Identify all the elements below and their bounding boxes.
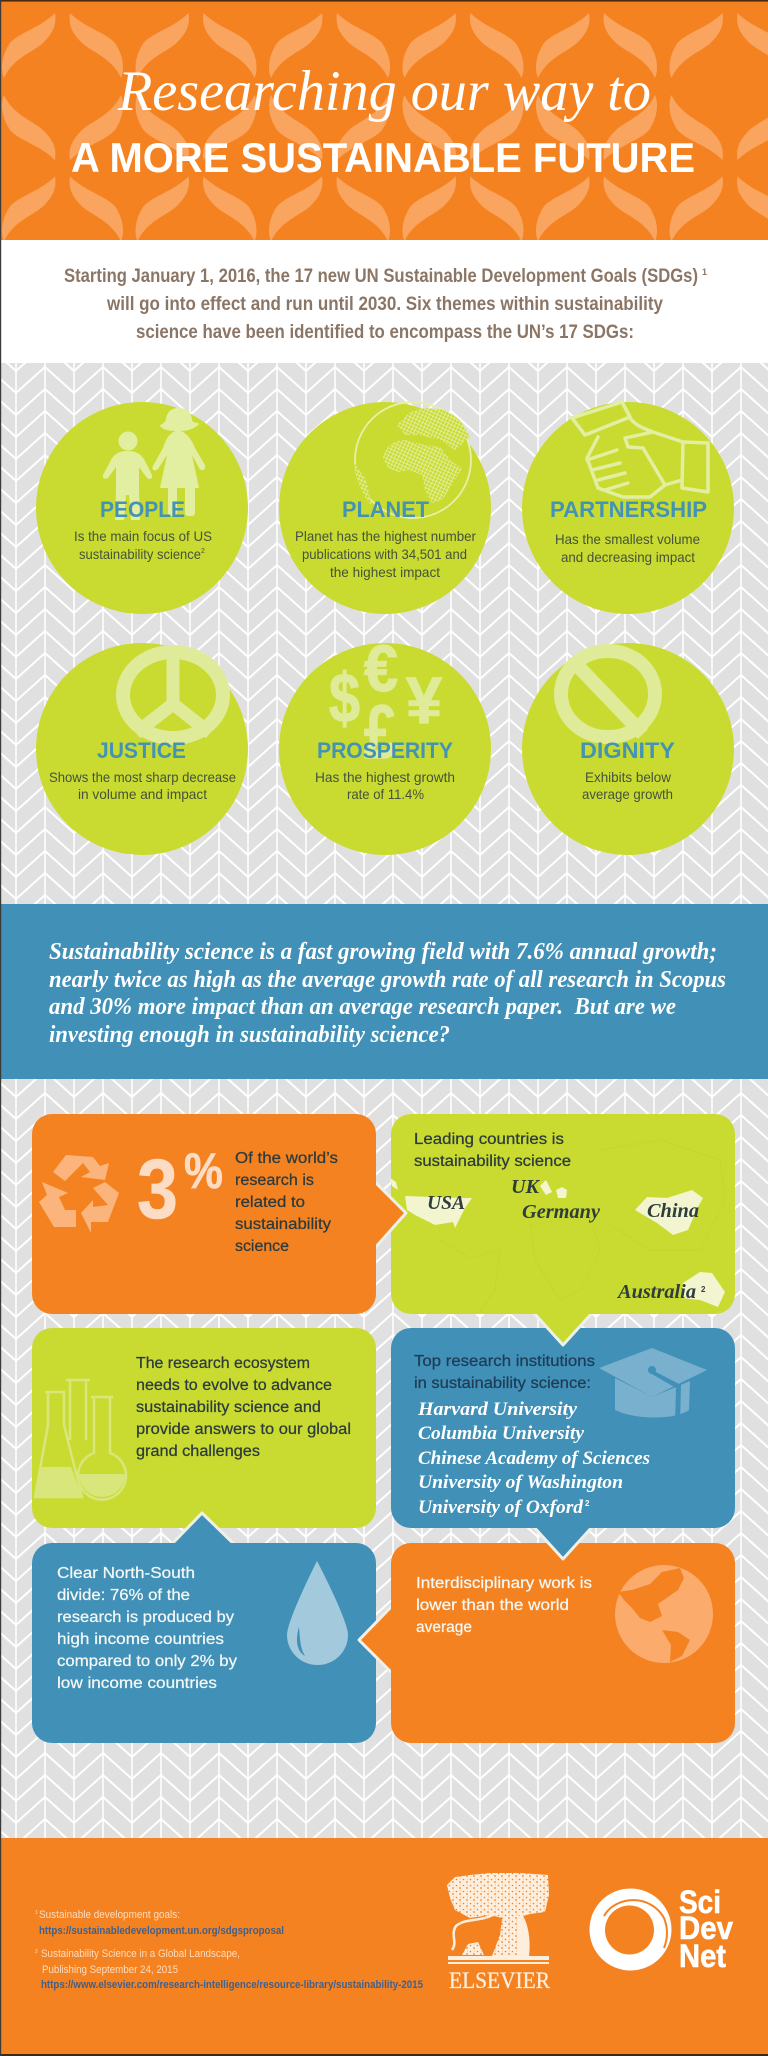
list: institutions: Harvard University <box>417 1399 578 1420</box>
footnotes: https://sustainabledevelopment.un.org/sdgsproposal <box>39 1925 284 1937</box>
arrow: down to interdisciplinary panel <box>533 1526 593 1559</box>
list: institutions <box>417 1399 650 1518</box>
map: faint outlines <box>430 1140 725 1312</box>
text: share of research: related to <box>235 1194 305 1211</box>
map labels: Germany <box>522 1201 600 1223</box>
footnotes: Publishing September 24, 2015 <box>42 1964 178 1976</box>
intro text block: 1 <box>702 267 707 277</box>
text: north-south divide: Clear North-South <box>57 1565 195 1582</box>
panel: interdisciplinary work <box>359 1543 735 1743</box>
panel: 3 percent <box>32 1114 406 1314</box>
text: planet: Planet has the highest number <box>295 528 476 544</box>
blue statement band: nearly twice as high as the average growth rate of all research in Scopus <box>49 967 726 993</box>
panel: north-south divide <box>32 1513 376 1743</box>
icon: currency symbols: $ <box>329 659 360 737</box>
text: partnership: Has the smallest volume <box>555 531 700 547</box>
footnotes: Sustainable development goals: <box>39 1909 180 1921</box>
panel: people <box>36 402 248 614</box>
text: partnership <box>555 531 700 565</box>
list: institutions: Chinese Academy of Sciences <box>418 1448 650 1469</box>
heading: dignity: DIGNITY <box>580 738 675 763</box>
text: people: Is the main focus of US <box>74 528 212 544</box>
blue statement band: and 30% more impact than an average research paper. But are we <box>49 994 676 1020</box>
heading: planet: PLANET <box>342 497 430 522</box>
arrow: right to countries panel <box>374 1181 406 1249</box>
text: people: sustainability science <box>79 546 201 562</box>
text: interdisciplinary work: average <box>416 1619 472 1636</box>
text: research ecosystem: needs to evolve to advance <box>136 1377 332 1394</box>
text: people: 2 <box>201 548 205 555</box>
text: research ecosystem <box>136 1355 351 1460</box>
icon: recycle <box>39 1155 119 1233</box>
text: north-south divide: compared to only 2% by <box>57 1653 237 1670</box>
text: planet <box>295 528 476 580</box>
title line two: A MORE SUSTAINABLE FUTURE <box>71 134 695 181</box>
text: leading countries <box>414 1131 571 1170</box>
map: highlighted countries <box>390 1178 725 1307</box>
intro text block: science have been identified to encompass the UN’s 17 SDGs: <box>136 321 634 343</box>
text: people <box>74 528 212 562</box>
icon: currency symbols: ¥ <box>406 663 442 737</box>
text: justice: Shows the most sharp decrease <box>49 769 236 785</box>
map labels <box>427 1176 706 1303</box>
text: leading countries: Leading countries is <box>414 1131 564 1148</box>
icon: currency symbols: £ <box>364 690 397 775</box>
footer <box>0 1838 768 2056</box>
panel: top institutions <box>391 1328 735 1559</box>
text: partnership: and decreasing impact <box>561 549 695 565</box>
text: research ecosystem: grand challenges <box>136 1443 260 1460</box>
title line one: Researching our way to <box>117 60 651 123</box>
map labels: UK <box>511 1176 541 1198</box>
text: share of research: sustainability <box>235 1216 331 1233</box>
text: share of research: science <box>235 1238 289 1255</box>
icon: globe <box>354 402 471 518</box>
icon: handshake <box>572 402 708 497</box>
logo: scidevnet: Dev <box>679 1910 733 1946</box>
map labels: 2 <box>701 1285 706 1294</box>
panel: partnership <box>522 402 734 614</box>
stat: 3 percent <box>137 1142 223 1236</box>
text: institutions intro <box>414 1353 595 1392</box>
map labels: USA <box>427 1192 465 1214</box>
arrow: up to ecosystem panel <box>170 1513 236 1546</box>
icon: prohibition sign <box>561 651 655 737</box>
panel: dignity <box>522 643 734 855</box>
icon: currency symbols <box>329 631 442 775</box>
intro text block: will go into effect and run until 2030. Six themes within sustainability <box>106 293 663 315</box>
logo: elsevier: ELSEVIER <box>449 1968 551 1993</box>
blue statement band: Sustainability science is a fast growing field with 7.6% annual growth; <box>49 939 717 965</box>
text: north-south divide: divide: 76% of the <box>57 1587 190 1604</box>
intro text block <box>0 240 768 363</box>
stat: 3 percent: 3 <box>137 1142 178 1236</box>
text: planet: publications with 34,501 and <box>302 546 467 562</box>
stat: 3 percent: % <box>184 1143 223 1199</box>
text: prosperity: Has the highest growth <box>315 769 455 785</box>
logo: scidevnet: Net <box>679 1938 726 1974</box>
panel: research ecosystem <box>32 1328 376 1528</box>
text: north-south divide: high income countries <box>57 1631 224 1648</box>
map labels: Australia <box>616 1281 696 1303</box>
icon: globe americas <box>615 1565 713 1663</box>
blue statement band: investing enough in sustainability science? <box>49 1022 450 1048</box>
text: interdisciplinary work: lower than the world <box>416 1597 569 1614</box>
list: institutions: 2 <box>585 1499 590 1508</box>
panel: prosperity <box>279 631 491 855</box>
panel: leading countries <box>390 1114 735 1345</box>
text: north-south divide <box>57 1565 237 1692</box>
map labels: China <box>647 1200 699 1222</box>
text: prosperity: rate of 11.4% <box>347 786 424 802</box>
text: institutions intro: in sustainability science: <box>414 1375 591 1392</box>
icon: children <box>103 408 205 520</box>
text: planet: the highest impact <box>330 564 440 580</box>
text: share of research: Of the world’s <box>235 1150 338 1167</box>
text: justice: in volume and impact <box>78 786 207 802</box>
text: share of research: research is <box>235 1172 314 1189</box>
panel: justice <box>36 643 248 855</box>
icon: water drop <box>287 1561 348 1665</box>
list: institutions: University of Washington <box>418 1472 623 1493</box>
arrow: down to institutions panel <box>533 1312 593 1345</box>
footnotes: 1 <box>35 1910 38 1916</box>
text: north-south divide: research is produced by <box>57 1609 234 1626</box>
heading: prosperity: PROSPERITY <box>317 738 453 763</box>
text: share of research <box>235 1150 338 1255</box>
text: leading countries: sustainability science <box>414 1153 571 1170</box>
list: institutions: University of Oxford <box>418 1497 584 1518</box>
logo: scidevnet: Sci <box>679 1884 721 1920</box>
footnotes: 2 <box>35 1949 38 1955</box>
text: prosperity <box>315 769 455 802</box>
footnotes: Sustainability Science in a Global Landscape, <box>41 1948 240 1960</box>
text: interdisciplinary work <box>416 1575 592 1636</box>
footnotes <box>35 1909 423 1991</box>
herringbone background <box>0 363 768 1839</box>
text: justice <box>49 769 236 802</box>
icon: peace sign <box>123 648 223 738</box>
text: research ecosystem: The research ecosystem <box>136 1355 310 1372</box>
icon: currency symbols: € <box>364 631 398 705</box>
list: institutions: Columbia University <box>418 1423 585 1444</box>
panel: planet <box>279 402 491 614</box>
footnotes: https://www.elsevier.com/research-intelligence/resource-library/sustainability-2015 <box>41 1979 423 1991</box>
icon: flasks <box>35 1380 126 1500</box>
heading: people: PEOPLE <box>100 497 185 522</box>
heading: partnership: PARTNERSHIP <box>550 497 707 522</box>
text: north-south divide: low income countries <box>57 1675 217 1692</box>
logo: elsevier <box>447 1873 551 1993</box>
text: institutions intro: Top research institutions <box>414 1353 595 1370</box>
text: research ecosystem: sustainability science and <box>136 1399 321 1416</box>
arrow: left to divide panel <box>359 1605 393 1674</box>
text: interdisciplinary work: Interdisciplinary work is <box>416 1575 592 1592</box>
text: dignity: Exhibits below <box>585 769 672 785</box>
text: research ecosystem: provide answers to our global <box>136 1421 351 1438</box>
heading: justice: JUSTICE <box>97 738 186 763</box>
text: dignity <box>582 769 673 802</box>
header banner <box>0 0 768 240</box>
logo: scidevnet <box>590 1884 733 1974</box>
text: dignity: average growth <box>582 786 673 802</box>
blue statement band <box>0 904 768 1079</box>
icon: graduation cap <box>599 1348 707 1429</box>
